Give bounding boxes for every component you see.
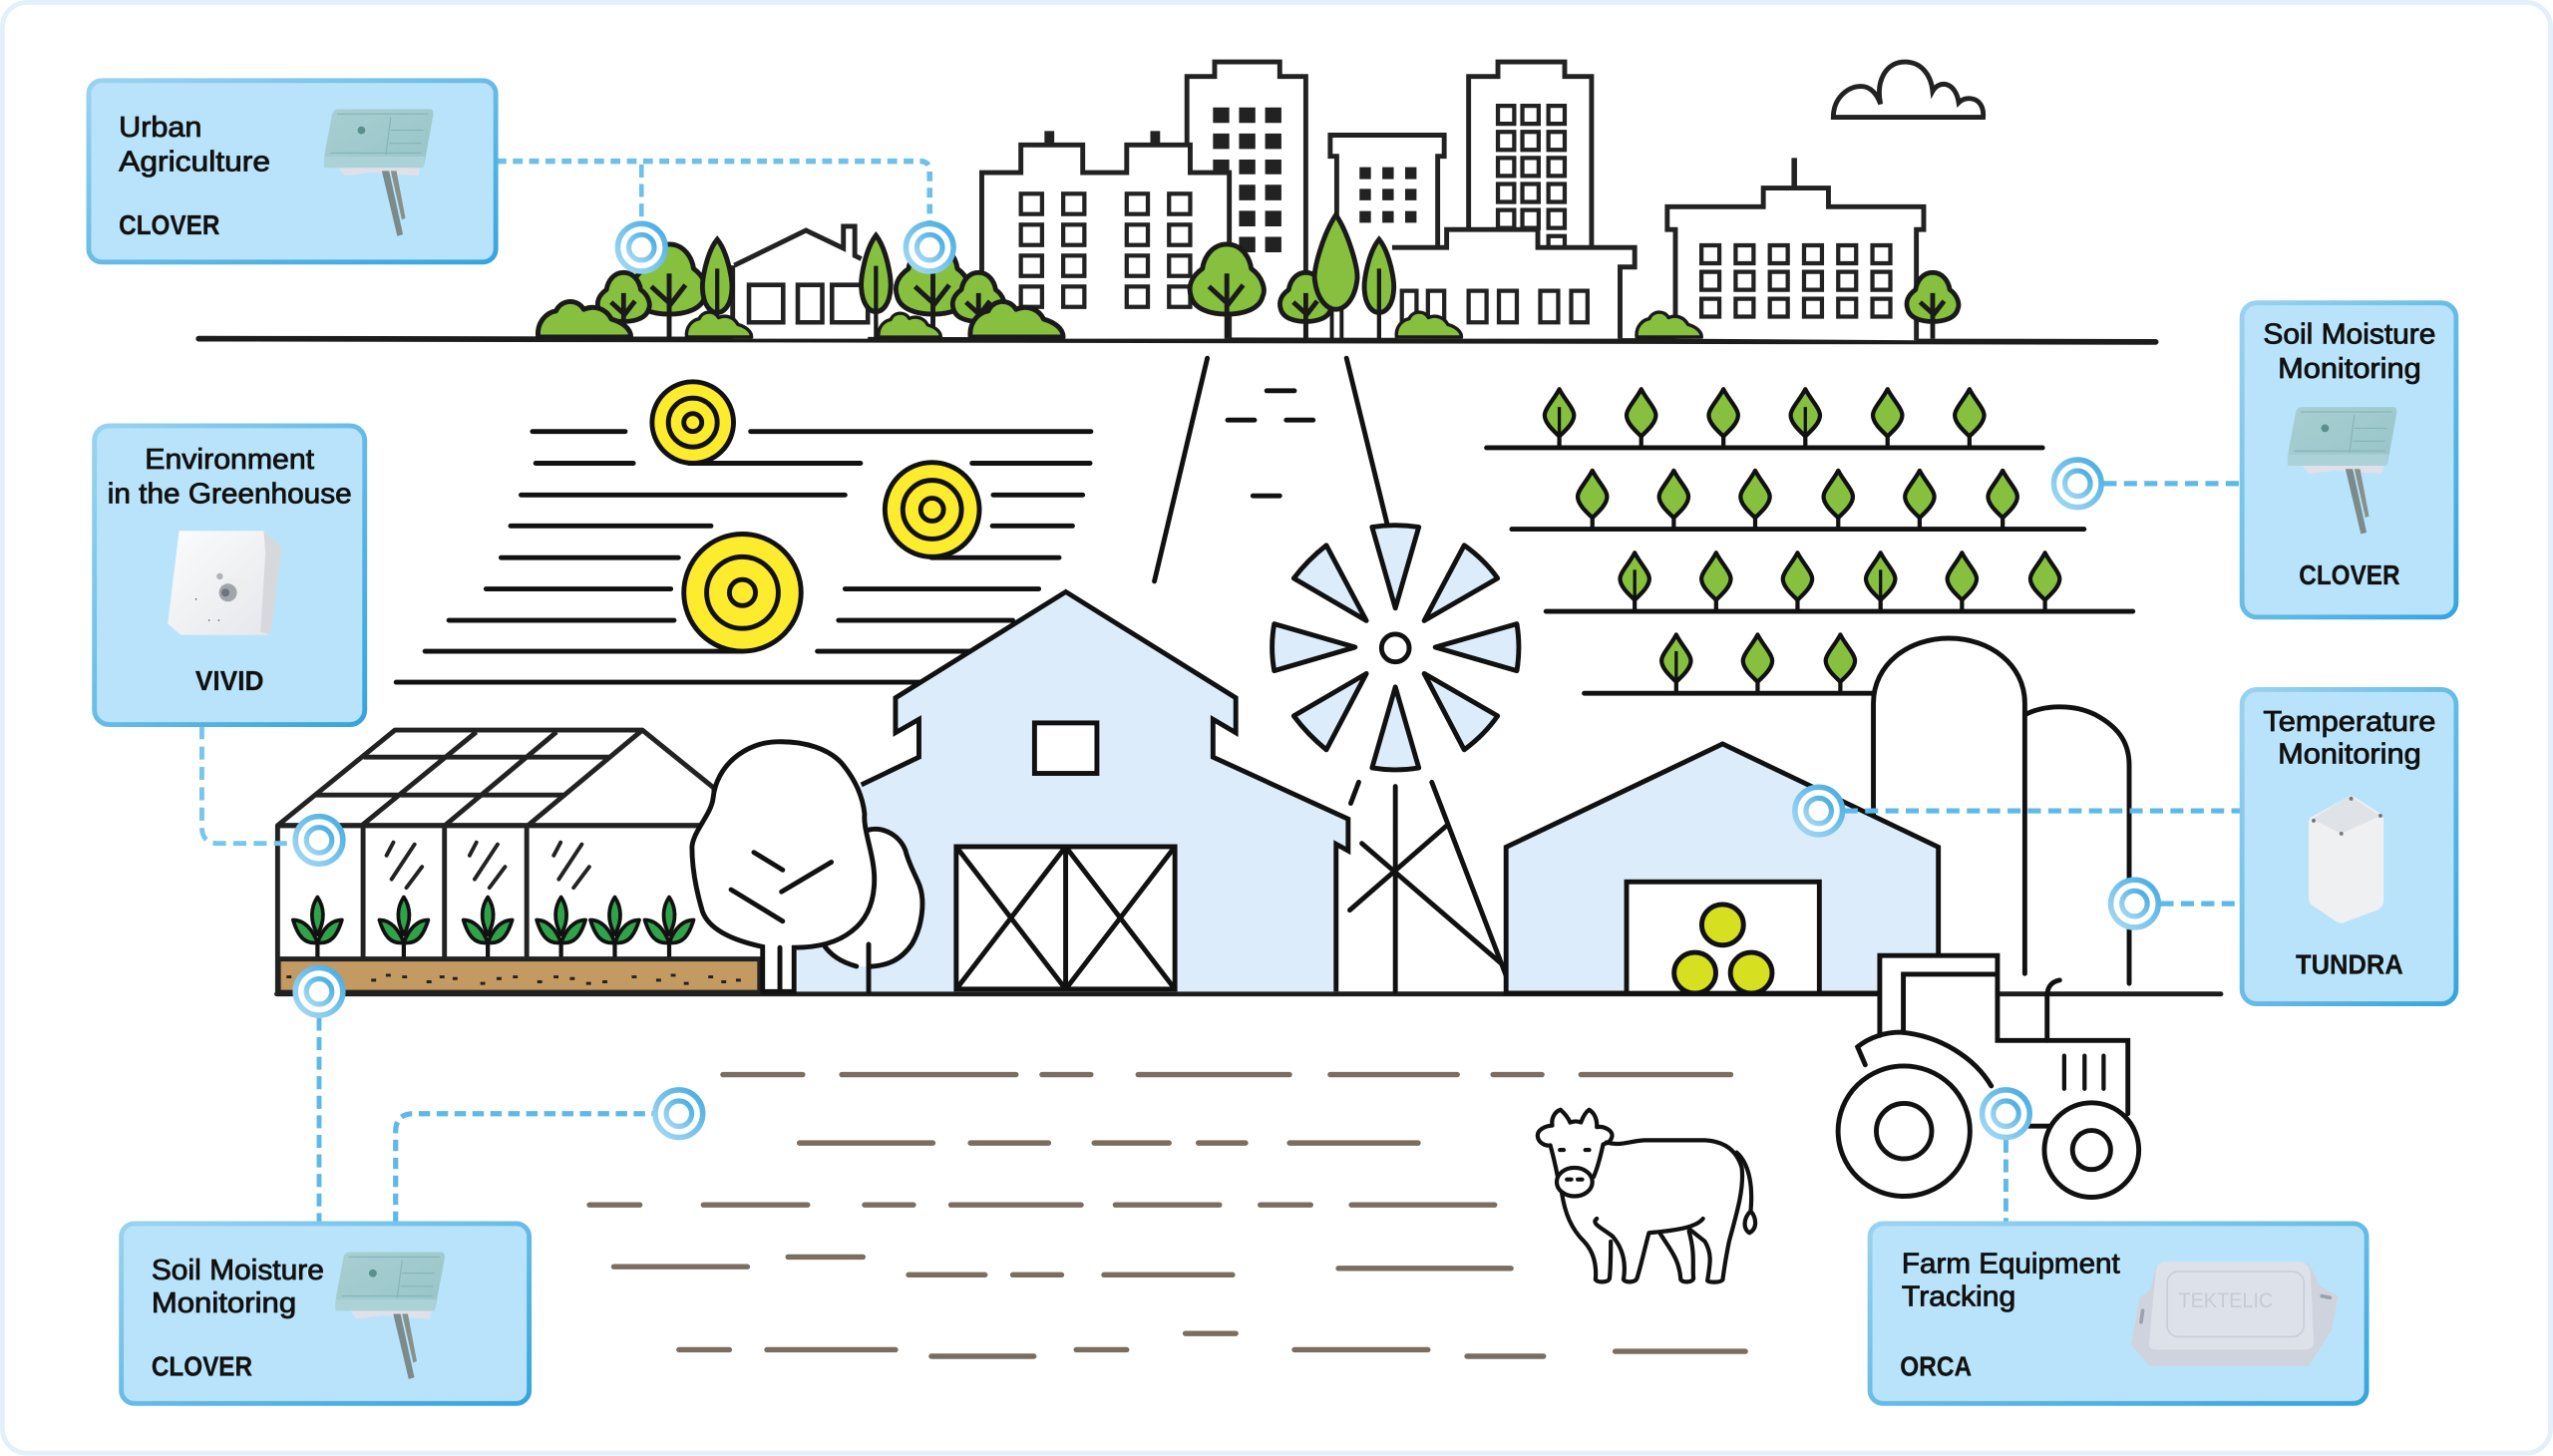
device: VIVID	[168, 531, 281, 635]
connector: farm equipment	[2005, 1140, 2007, 1223]
panel: soil moisture right	[2242, 303, 2456, 617]
panel: urban agriculture: Urban	[119, 112, 201, 144]
connector: urban agriculture	[497, 162, 929, 223]
barn doors	[956, 845, 1175, 990]
silos	[1874, 638, 2129, 983]
big white tree	[692, 742, 875, 991]
stacked hay bales	[1674, 905, 1772, 993]
greenhouse seedlings	[293, 898, 694, 959]
small tree behind	[822, 829, 922, 991]
tractor rear wheel	[1838, 1066, 1970, 1197]
hay field lines	[396, 432, 1091, 682]
main barn	[797, 591, 1348, 991]
suburban house	[733, 226, 868, 339]
panel: soil moisture bottom: Monitoring	[152, 1287, 296, 1319]
city skyline	[733, 62, 1924, 340]
road	[1155, 358, 1387, 581]
barn door opening	[1627, 882, 1819, 993]
panel: environment in the greenhouse: Environment	[145, 444, 314, 476]
panel: farm equipment tracking	[1870, 1224, 2367, 1403]
connector: greenhouse environment	[201, 726, 296, 844]
panel: urban agriculture: Agriculture	[119, 146, 270, 178]
tall building with outlined windows	[1469, 62, 1592, 247]
skyline ground line	[198, 339, 2156, 342]
sensor markers	[295, 223, 2158, 1138]
panel: urban agriculture: CLOVER	[119, 209, 219, 240]
hay bale 2	[885, 463, 979, 556]
panel: farm equipment tracking: Tracking	[1902, 1280, 2015, 1312]
panel: soil moisture right: CLOVER	[2299, 559, 2400, 590]
panel: urban agriculture	[89, 81, 496, 262]
panel: soil moisture bottom: Soil Moisture	[152, 1255, 324, 1286]
connector: temperature monitoring	[1845, 811, 2242, 904]
panel: temperature monitoring: Temperature	[2263, 706, 2435, 738]
cloud	[1833, 62, 1984, 118]
pasture lines	[589, 1075, 1745, 1356]
crop rows	[1487, 389, 2133, 693]
panel: soil moisture bottom	[122, 1224, 530, 1403]
cow	[1538, 1110, 1755, 1282]
main ground line	[277, 992, 2221, 995]
tall building with dark windows	[1187, 62, 1305, 339]
panel: environment in the greenhouse: in the Greenhouse	[108, 478, 352, 510]
panel: farm equipment tracking: Farm Equipment	[1902, 1249, 2120, 1280]
right civic building	[1667, 158, 1924, 340]
panel: farm equipment tracking: ORCA	[1900, 1351, 1972, 1382]
greenhouse	[277, 730, 760, 993]
panel: environment in the greenhouse	[95, 426, 365, 725]
barn window	[1034, 723, 1097, 774]
device: ORCA: TEKTELIC	[2178, 1289, 2273, 1312]
device: TUNDRA	[2309, 796, 2383, 923]
storage barn	[1506, 744, 1939, 993]
low building	[1351, 229, 1635, 339]
panel: temperature monitoring: TUNDRA	[2296, 948, 2403, 979]
panel: soil moisture bottom: CLOVER	[152, 1351, 252, 1382]
windmill	[1273, 526, 1519, 991]
panel: soil moisture right: Monitoring	[2278, 353, 2421, 385]
tractor front wheel	[2044, 1103, 2139, 1197]
connector: bottom soil moisture	[319, 1017, 654, 1223]
middle building	[1330, 136, 1444, 247]
panel: soil moisture right: Soil Moisture	[2263, 318, 2435, 350]
front apartment building	[981, 134, 1230, 339]
windmill tower	[1349, 782, 1507, 991]
panel: temperature monitoring	[2242, 689, 2456, 1004]
tractor	[1838, 955, 2139, 1197]
soil bed	[278, 959, 760, 992]
panel: environment in the greenhouse: VIVID	[195, 665, 263, 696]
panel: temperature monitoring: Monitoring	[2278, 739, 2421, 771]
connector: right soil moisture	[2103, 482, 2242, 485]
device: ORCA	[2131, 1262, 2338, 1366]
hay bale 3	[684, 535, 801, 651]
hay bale 1	[652, 382, 734, 463]
street trees and bushes	[538, 215, 1959, 339]
